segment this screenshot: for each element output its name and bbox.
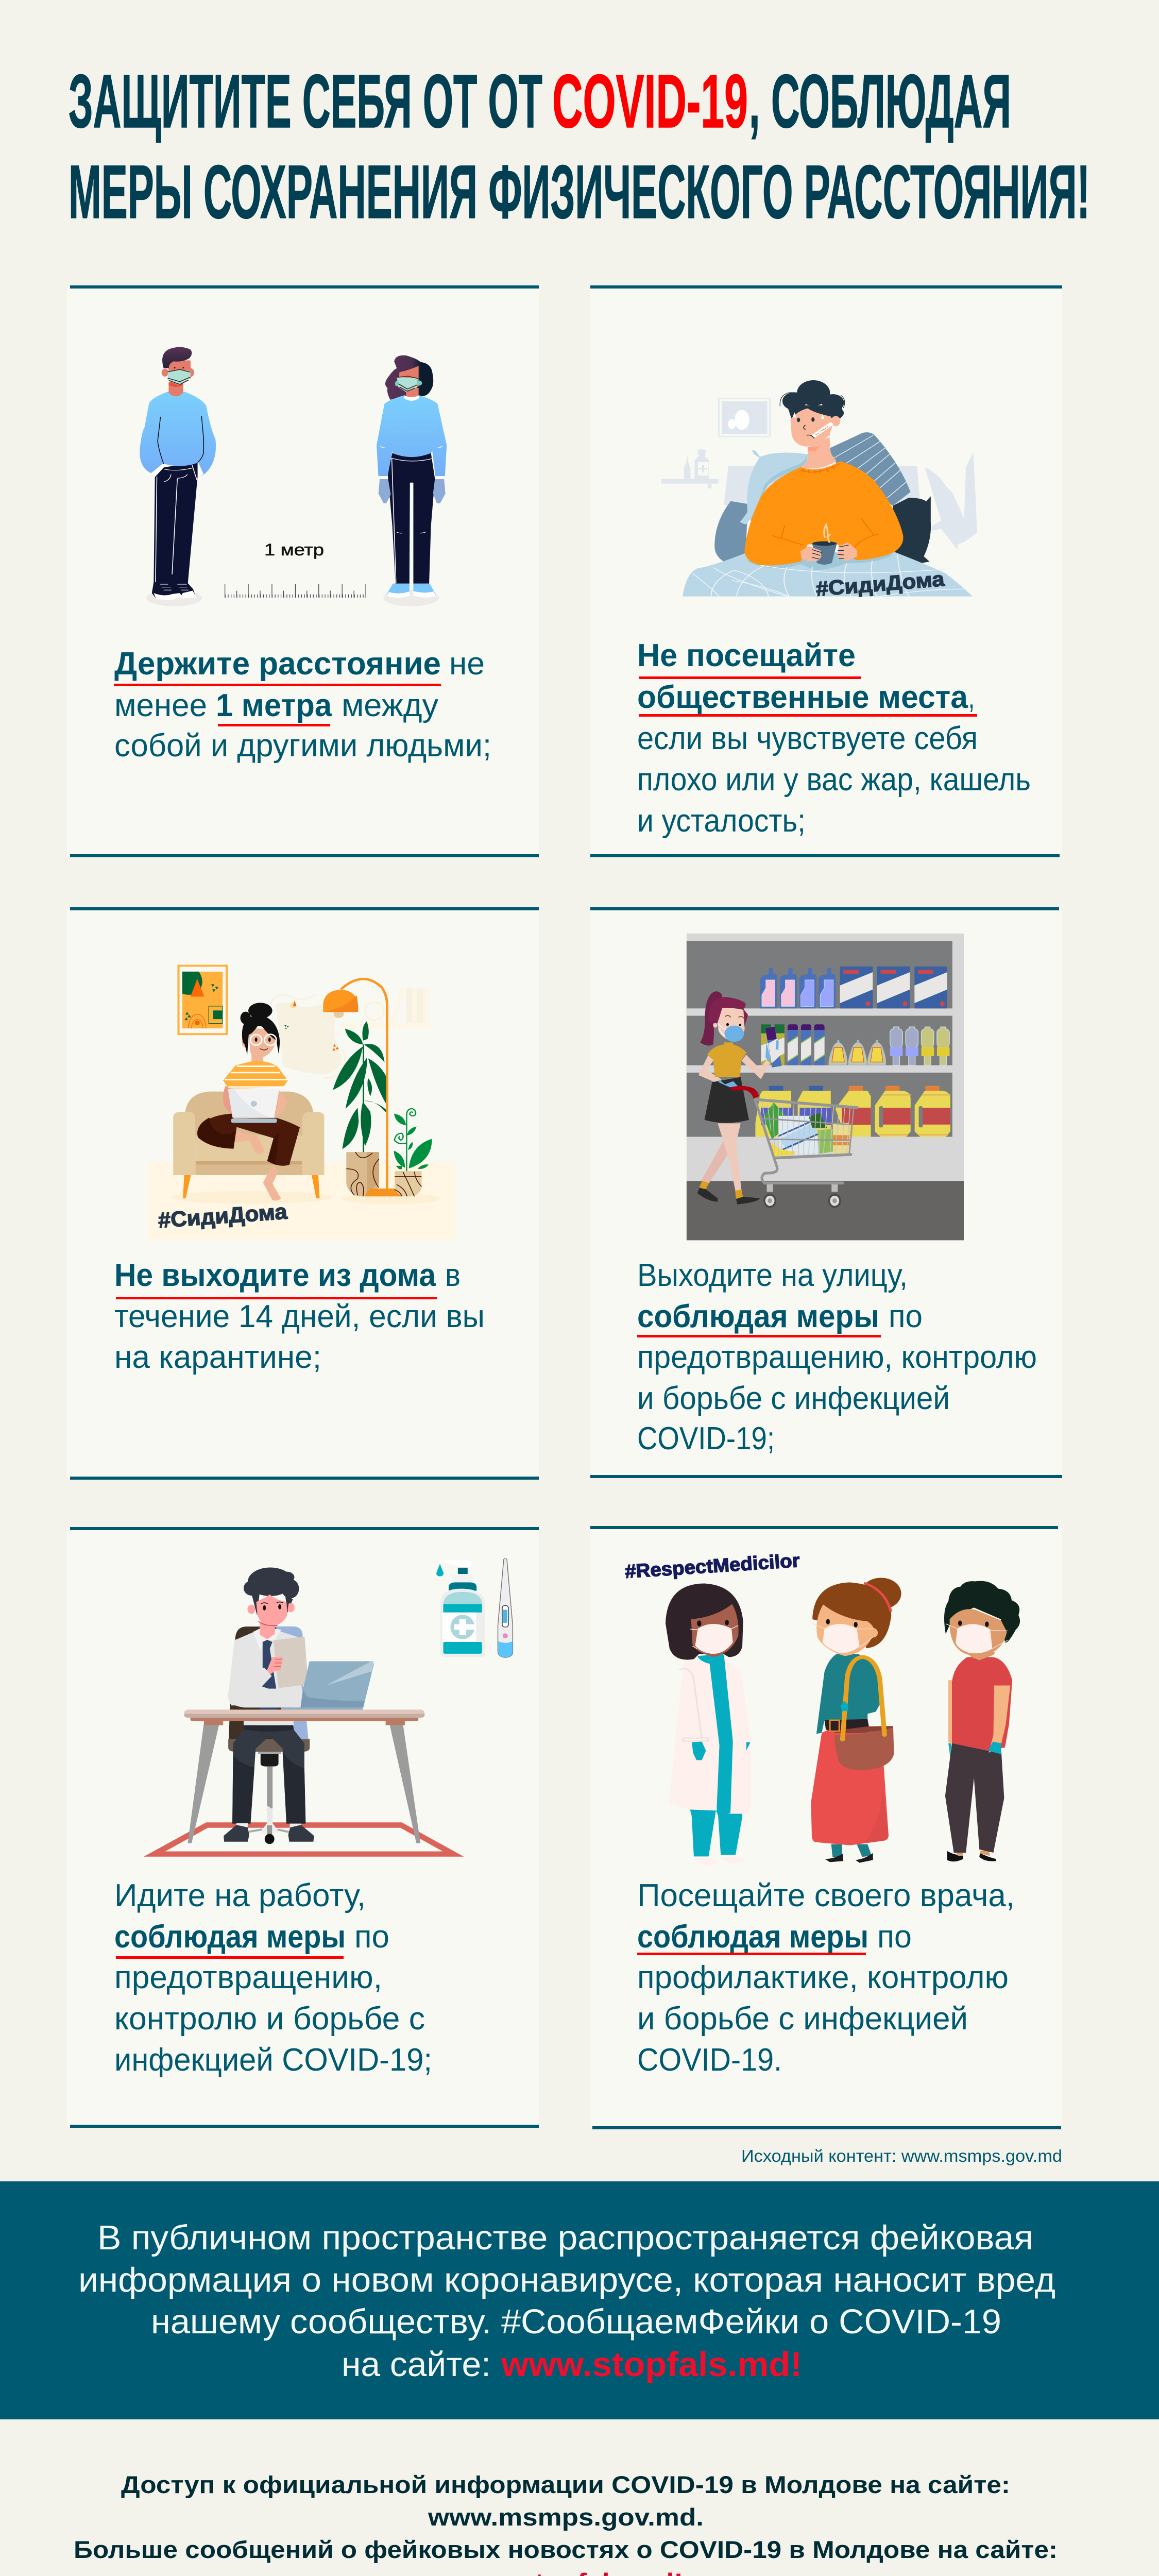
text block <box>114 1258 485 1375</box>
text block: инфекцией COVID-19; <box>114 2042 432 2078</box>
panel: go to work <box>67 1527 539 2128</box>
text block: по <box>877 1919 912 1955</box>
text block: 1 метра <box>216 688 332 723</box>
text block: собой и другими людьми; <box>114 728 491 764</box>
text block: менее <box>114 688 207 723</box>
banner text: В публичном пространстве распространяется фейковая <box>97 2218 1033 2257</box>
text block: по <box>354 1919 389 1955</box>
text block: и усталость; <box>637 803 806 839</box>
text block: если вы чувствуете себя <box>637 721 978 756</box>
illustration: two people one metre apart <box>140 347 447 606</box>
text block: предотвращению, <box>114 1960 382 1995</box>
text block <box>637 638 1031 839</box>
panel: public places <box>590 285 1062 857</box>
illustration: man at desk with sanitizer and thermometer <box>144 1558 513 1857</box>
banner text: на сайте: <box>342 2345 491 2384</box>
text block: Не посещайте <box>637 638 856 673</box>
text block <box>637 1258 1037 1456</box>
text block: общественные места <box>637 680 968 715</box>
illustration: three people in masks <box>624 1550 1020 1865</box>
banner text <box>78 2218 1055 2384</box>
text block: по <box>889 1299 923 1334</box>
footer text: Доступ к официальной информации COVID-19 в Молдове на сайте: <box>121 2471 1010 2498</box>
panel: stay home <box>67 907 539 1480</box>
illustration: woman shopping with cart <box>687 934 964 1240</box>
text block: соблюдая меры <box>637 1299 879 1334</box>
text block: между <box>342 688 438 723</box>
text block: Не выходите из дома <box>114 1258 436 1293</box>
source note: Исходный контент: www.msmps.gov.md <box>741 2146 1062 2165</box>
text block: контролю и борьбе с <box>114 2001 425 2037</box>
hashtag: #СидиДома <box>815 568 946 601</box>
text block: на карантине; <box>114 1340 321 1375</box>
illustration: woman with laptop on sofa <box>148 965 455 1241</box>
text block: предотвращению, контролю <box>637 1340 1037 1375</box>
panel: visit doctor <box>590 1526 1062 2129</box>
illustration: sick man with thermometer <box>661 380 977 601</box>
text block: Держите расстояние <box>114 646 441 682</box>
banner text: нашему сообществу. #СообщаемФейки о COVID-19 <box>151 2302 1001 2341</box>
banner <box>0 2181 1159 2419</box>
text block: не <box>449 646 485 682</box>
hashtag: #RespectMedicilor <box>624 1550 800 1582</box>
label: 1 metre: 1 метр <box>264 540 324 559</box>
footer text: www.msmps.gov.md. <box>428 2503 704 2531</box>
title: COVID-19 <box>552 59 748 144</box>
text block: и борьбе с инфекцией <box>637 2001 968 2037</box>
text block: течение 14 дней, если вы <box>114 1299 485 1334</box>
title <box>69 59 1090 234</box>
footer text <box>74 2471 1058 2576</box>
text block: Выходите на улицу, <box>637 1258 908 1293</box>
text block: соблюдая меры <box>637 1919 868 1955</box>
text block <box>637 1878 1015 2078</box>
text block: профилактике, контролю <box>637 1960 1009 1995</box>
footer text: Больше сообщений о фейковых новостях о COVID-19 в Молдове на сайте: <box>74 2536 1058 2563</box>
banner text: информация о новом коронавирусе, которая наносит вред <box>78 2261 1055 2299</box>
panel: keep distance <box>67 285 539 857</box>
panel: go outside <box>590 907 1062 1478</box>
title: ЗАЩИТИТЕ СЕБЯ ОТ ОТ <box>69 59 542 144</box>
text block: соблюдая меры <box>114 1919 346 1955</box>
text block: COVID-19. <box>637 2042 782 2078</box>
text block <box>114 1878 432 2078</box>
text block: , <box>968 680 975 715</box>
text block: плохо или у вас жар, кашель <box>637 762 1031 798</box>
text block: в <box>445 1258 461 1293</box>
text block: и борьбе с инфекцией <box>637 1381 950 1416</box>
text block: Идите на работу, <box>114 1878 366 1913</box>
hashtag: #СидиДома <box>157 1199 288 1232</box>
banner text: www.stopfals.md! <box>501 2345 802 2384</box>
text block: COVID-19; <box>637 1421 775 1456</box>
text block <box>114 646 491 764</box>
text block: Посещайте своего врача, <box>637 1878 1015 1913</box>
